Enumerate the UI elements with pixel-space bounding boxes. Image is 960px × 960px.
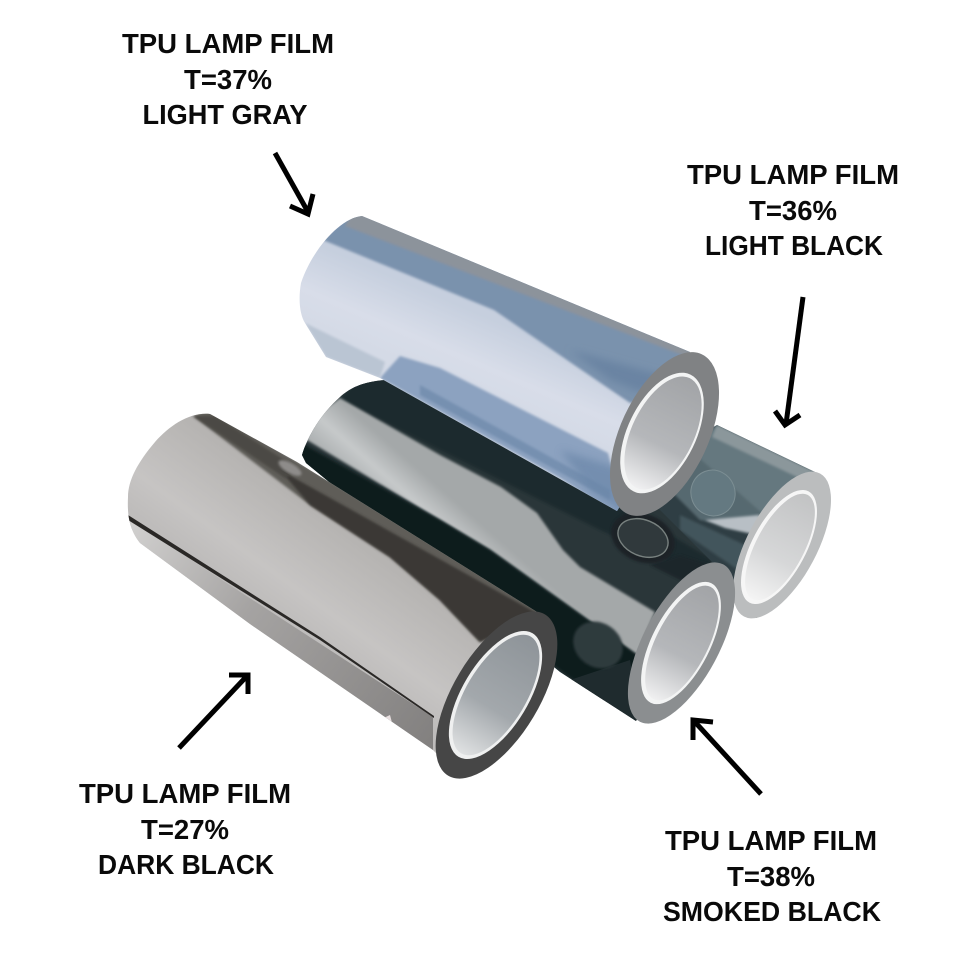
roll: dark black (front left) (128, 414, 558, 779)
roll: smoked black (middle) (302, 380, 735, 724)
label: light black (687, 159, 899, 261)
label: light gray: TPU LAMP FILM (122, 28, 334, 59)
label: light gray: T=37% (184, 64, 272, 95)
label: light gray: LIGHT GRAY (142, 99, 308, 130)
roll face: dark black (411, 592, 582, 798)
roll: light gray (top) (300, 216, 719, 516)
label: dark black: TPU LAMP FILM (79, 778, 291, 809)
arrow: to light gray roll (275, 153, 313, 214)
arrow: to light black roll (775, 297, 803, 425)
roll face: light gray (587, 336, 742, 532)
label: light gray (122, 28, 334, 130)
label: dark black: DARK BLACK (98, 849, 274, 880)
label: light black: TPU LAMP FILM (687, 159, 899, 190)
label: light black: LIGHT BLACK (705, 230, 883, 261)
roll face: smoked black (606, 547, 757, 739)
label: smoked black: SMOKED BLACK (663, 896, 881, 927)
label: smoked black: TPU LAMP FILM (665, 825, 877, 856)
label: dark black (79, 778, 291, 880)
label: dark black: T=27% (141, 814, 229, 845)
label: light black: T=36% (749, 195, 837, 226)
roll: light black (back right) (658, 425, 831, 618)
label: smoked black: T=38% (727, 861, 815, 892)
label: smoked black (663, 825, 881, 927)
arrow: to dark black roll (179, 675, 248, 748)
roll face: light black (713, 457, 851, 633)
arrow: to smoked black roll (693, 720, 761, 794)
